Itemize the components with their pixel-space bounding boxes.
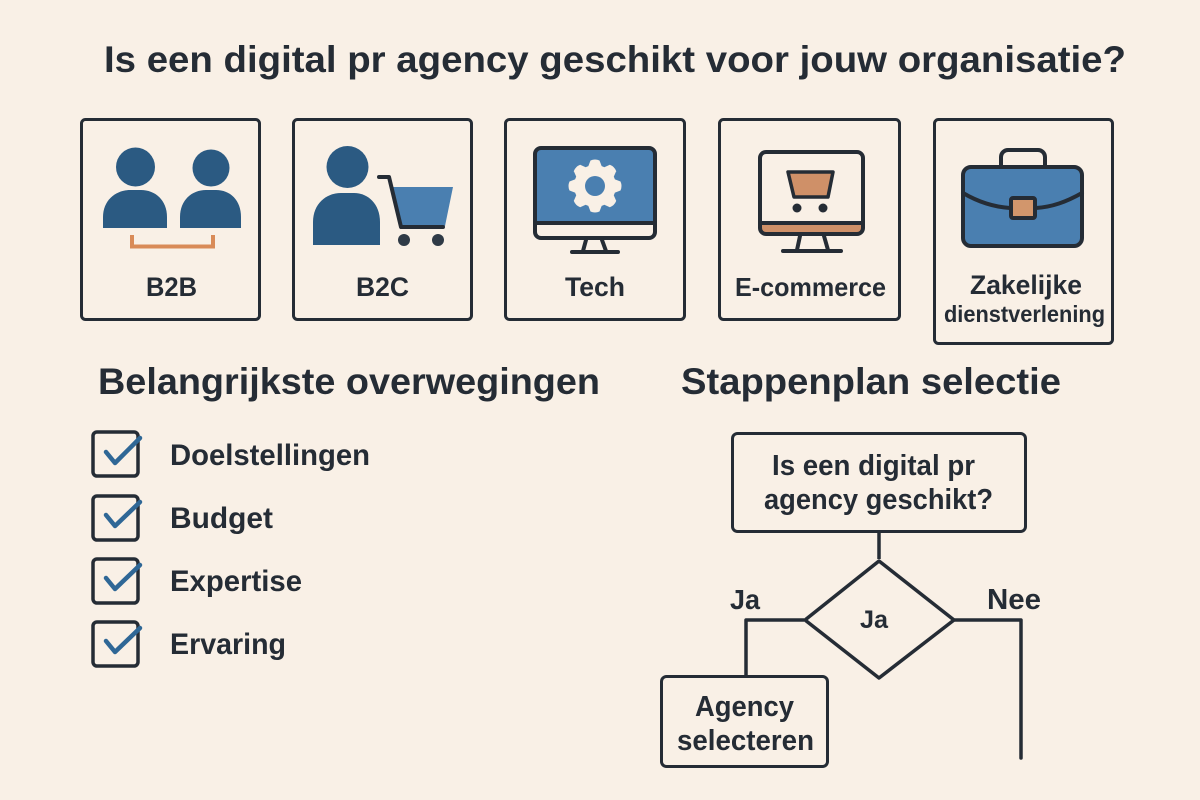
title: Is een digital pr agency geschikt voor jouw organisatie? [104,39,1126,80]
panel: B2B [82,120,260,320]
label: Zakelijke dienstverlening [944,270,1105,327]
icon: person with shopping cart [313,146,453,246]
panel: E-commerce [720,120,900,320]
flow box: Agency selecteren: Agency [695,691,794,723]
item: Expertise: Expertise [170,565,302,598]
label: Nee branch: Nee [987,584,1041,616]
label: Ja branch: Ja [730,584,760,615]
decision diamond: Ja [860,606,889,634]
label: Zakelijke dienstverlening: Zakelijke [970,270,1082,300]
flow box: start question [732,434,1026,532]
flowchart [662,434,1041,766]
flow box: Agency selecteren [662,676,828,766]
icon: two people with connector [103,148,241,246]
heading: Belangrijkste overwegingen: Belangrijkste overwegingen [98,361,600,402]
flow box: Agency selecteren: selecteren [677,725,814,757]
label: Tech: Tech [565,272,625,302]
flow box: start question: agency geschikt? [764,484,993,516]
item: Ervaring: Ervaring [170,628,286,661]
label: E-commerce: E-commerce [735,272,886,302]
panel: Tech [506,120,684,320]
arrow: Nee branch [955,620,1021,758]
label: B2B: B2B [146,272,197,302]
label: Zakelijke dienstverlening: dienstverlening [944,301,1105,327]
item: Doelstellingen [93,432,370,476]
icon: briefcase [963,150,1082,246]
icon: monitor with cart [760,152,863,251]
item: Doelstellingen: Doelstellingen [170,439,370,472]
heading: Stappenplan selectie: Stappenplan selectie [681,361,1061,402]
panel: B2C [294,120,472,320]
icon: monitor with gear [535,148,655,252]
item: Budget [93,496,273,540]
panel: checklist [93,432,370,666]
item: Budget: Budget [170,502,273,535]
decision diamond [805,561,954,678]
flow box: start question: Is een digital pr [772,450,975,482]
panel: Zakelijke dienstverlening [934,120,1112,344]
arrow: question to decision [877,533,881,559]
label: B2C: B2C [356,272,409,302]
item: Ervaring [93,622,286,666]
item: Expertise [93,559,302,603]
arrow: Ja branch [746,620,804,675]
